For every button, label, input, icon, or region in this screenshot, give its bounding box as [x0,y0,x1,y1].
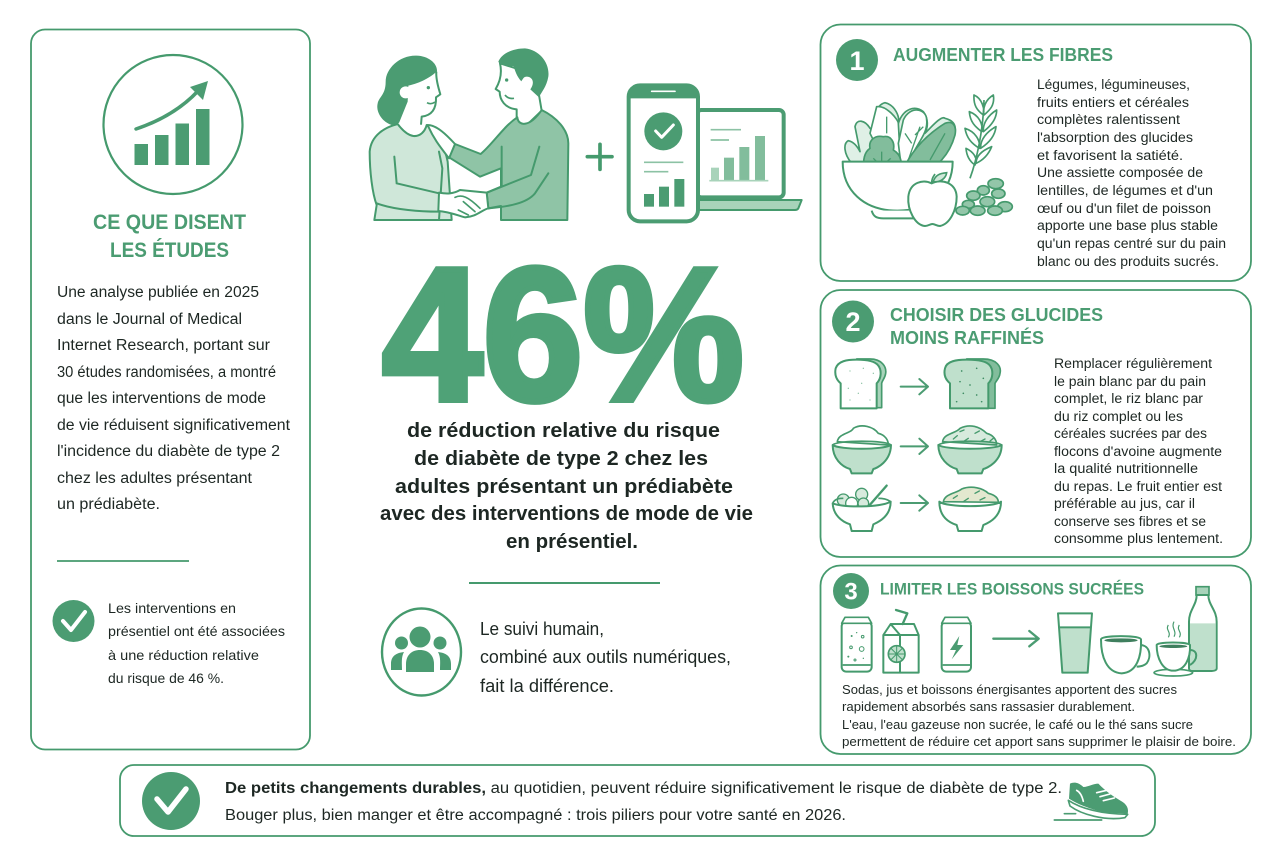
text block: étude: dans le Journal of Medical [57,311,242,328]
icon: phone [629,85,698,221]
text block: réduction relative: avec des interventions de mode de vie [380,503,753,525]
text block 1: et favorisent la satiété. [1037,148,1183,163]
text block 1: fruits entiers et céréales [1037,95,1189,110]
text block 2: préférable au jus, car il [1054,496,1195,511]
text block: étude: l'incidence du diabète de type 2 [57,443,280,460]
heading 2: MOINS RAFFINÉS [890,327,1044,348]
text block 1 [1037,77,1226,269]
icon: tea cup [1154,622,1196,676]
heading 1: AUGMENTER LES FIBRES [893,45,1113,65]
text block 3: permettent de réduire cet apport sans supprimer le plaisir de boire. [842,734,1236,749]
text block 1: l'absorption des glucides [1037,130,1193,145]
icon: water bottle [1189,587,1217,671]
text block 2 [1054,356,1223,546]
text block: réduction relative: en présentiel. [506,531,638,553]
text block: note: présentiel ont été associées [108,623,285,639]
icon: oatmeal [939,487,1001,531]
heading 2 [890,305,1103,348]
text block: réduction relative [380,420,753,553]
arrow [901,379,928,394]
icons: food swaps [833,359,1002,531]
text block 2: flocons d'avoine augmente [1054,444,1222,459]
text block 1: qu'un repas centré sur du pain [1037,236,1226,251]
icon: juice carton [883,610,919,673]
icon: brown rice [938,426,1002,473]
heading 3: LIMITER LES BOISSONS SUCRÉES [880,580,1144,598]
text block: étude [57,284,291,513]
panel 2: choisir des glucides moins raffinés [820,290,1251,557]
arrow [993,631,1039,646]
heading: ce que disent les études: LES ÉTUDES [110,239,229,262]
text block: étude: de vie réduisent significativement [57,417,291,434]
handshake [438,190,488,217]
text: conclusion: Bouger plus, bien manger et être accompagné : trois piliers pour votre santé en 2026. [225,807,846,824]
arrow [901,439,928,454]
icon: growth chart [104,55,242,194]
panel: conclusion [120,765,1155,836]
text block 1: Une assiette composée de [1037,165,1203,180]
text block 1: Légumes, légumineuses, [1037,77,1190,92]
text block: étude: chez les adultes présentant [57,470,253,487]
text block 1: blanc ou des produits sucrés. [1037,254,1219,269]
icon: running shoe [1054,783,1128,820]
text block: note: Les interventions en [108,600,236,616]
text block 2: conserve ses fibres et se [1054,514,1206,529]
text block 2: consomme plus lentement. [1054,531,1223,546]
icon: group of people [382,608,461,696]
text block: étude: 30 études randomisées, a montré [57,364,276,381]
panel 3: limiter les boissons sucrées [820,566,1251,754]
text block 3: rapidement absorbés sans rassasier durablement. [842,699,1135,714]
text block 2: la qualité nutritionnelle [1054,461,1198,476]
text block: étude: Internet Research, portant sur [57,337,270,354]
text block 1: complètes ralentissent [1037,112,1180,127]
icon: water glass [1058,613,1092,673]
heading: ce que disent les études: CE QUE DISENT [93,211,246,234]
text block 2: complet, le riz blanc par [1054,391,1204,406]
text block 1: apporte une base plus stable [1037,218,1218,233]
text block: étude: Une analyse publiée en 2025 [57,284,259,301]
badge 2 [832,300,874,342]
text block: suivi humain: Le suivi humain, [480,619,604,639]
panel: ce que disent les études [31,30,310,750]
arrow [901,495,928,511]
icon: whole bread [944,359,1000,408]
badge 1 [836,39,878,81]
icons: drinks [842,587,1217,676]
text block 2: le pain blanc par du pain [1054,374,1206,389]
badge 1: 1 [849,46,865,76]
text block: réduction relative: de diabète de type 2 chez les [414,448,708,470]
man [428,48,568,220]
text block: note: du risque de 46 %. [108,670,224,686]
text block 1: œuf ou d'un filet de poisson [1037,201,1211,216]
text: conclusion [225,780,1062,824]
text block: suivi humain: fait la différence. [480,676,614,696]
text block: étude: que les interventions de mode [57,390,266,407]
woman [370,56,452,220]
illustration: two people shaking hands [370,48,568,220]
text block: suivi humain: combiné aux outils numériques, [480,647,731,667]
text block: réduction relative: adultes présentant un prédiabète [395,476,733,498]
icon: energy drink [942,617,971,672]
text block: étude: un prédiabète. [57,496,160,513]
text block: réduction relative: de réduction relative du risque [407,420,720,442]
text block 3 [842,682,1236,749]
text: conclusion: De petits changements durables, au quotidien, peuvent réduire significativement le risque de diabète de type 2. [225,780,1062,797]
icon: check [142,772,200,830]
icon: plus [587,144,612,169]
text block: note: à une réduction relative [108,647,259,663]
icon: check [52,600,94,642]
panel 1: augmenter les fibres [820,24,1251,281]
icon: bowl of vegetables, wheat, apple, lentils [843,95,1012,226]
icon: coffee cup [1101,636,1149,673]
text block 2: du repas. Le fruit entier est [1054,479,1222,494]
icon: laptop [697,110,802,210]
big number: 46%: 46% [382,229,744,441]
icon: soda can [842,617,872,672]
badge 3 [833,573,869,609]
heading 2: CHOISIR DES GLUCIDES [890,305,1103,325]
icon: sugary cereal [833,486,891,531]
text block 2: céréales sucrées par des [1054,426,1207,441]
text block 2: Remplacer régulièrement [1054,356,1212,371]
heading: ce que disent les études [93,211,246,262]
text block: note [108,600,285,686]
text block: suivi humain [480,619,731,696]
text block 2: du riz complet ou les [1054,409,1183,424]
text block 3: L'eau, l'eau gazeuse non sucrée, le café ou le thé sans sucre [842,717,1193,732]
badge 3: 3 [844,578,858,606]
text block 3: Sodas, jus et boissons énergisantes apportent des sucres [842,682,1177,697]
icon: white bread [835,359,886,408]
icon: white rice [833,426,891,473]
text block 1: lentilles, de légumes et d'un [1037,183,1213,198]
illustration: digital tools [587,85,802,221]
badge 2: 2 [845,307,861,337]
